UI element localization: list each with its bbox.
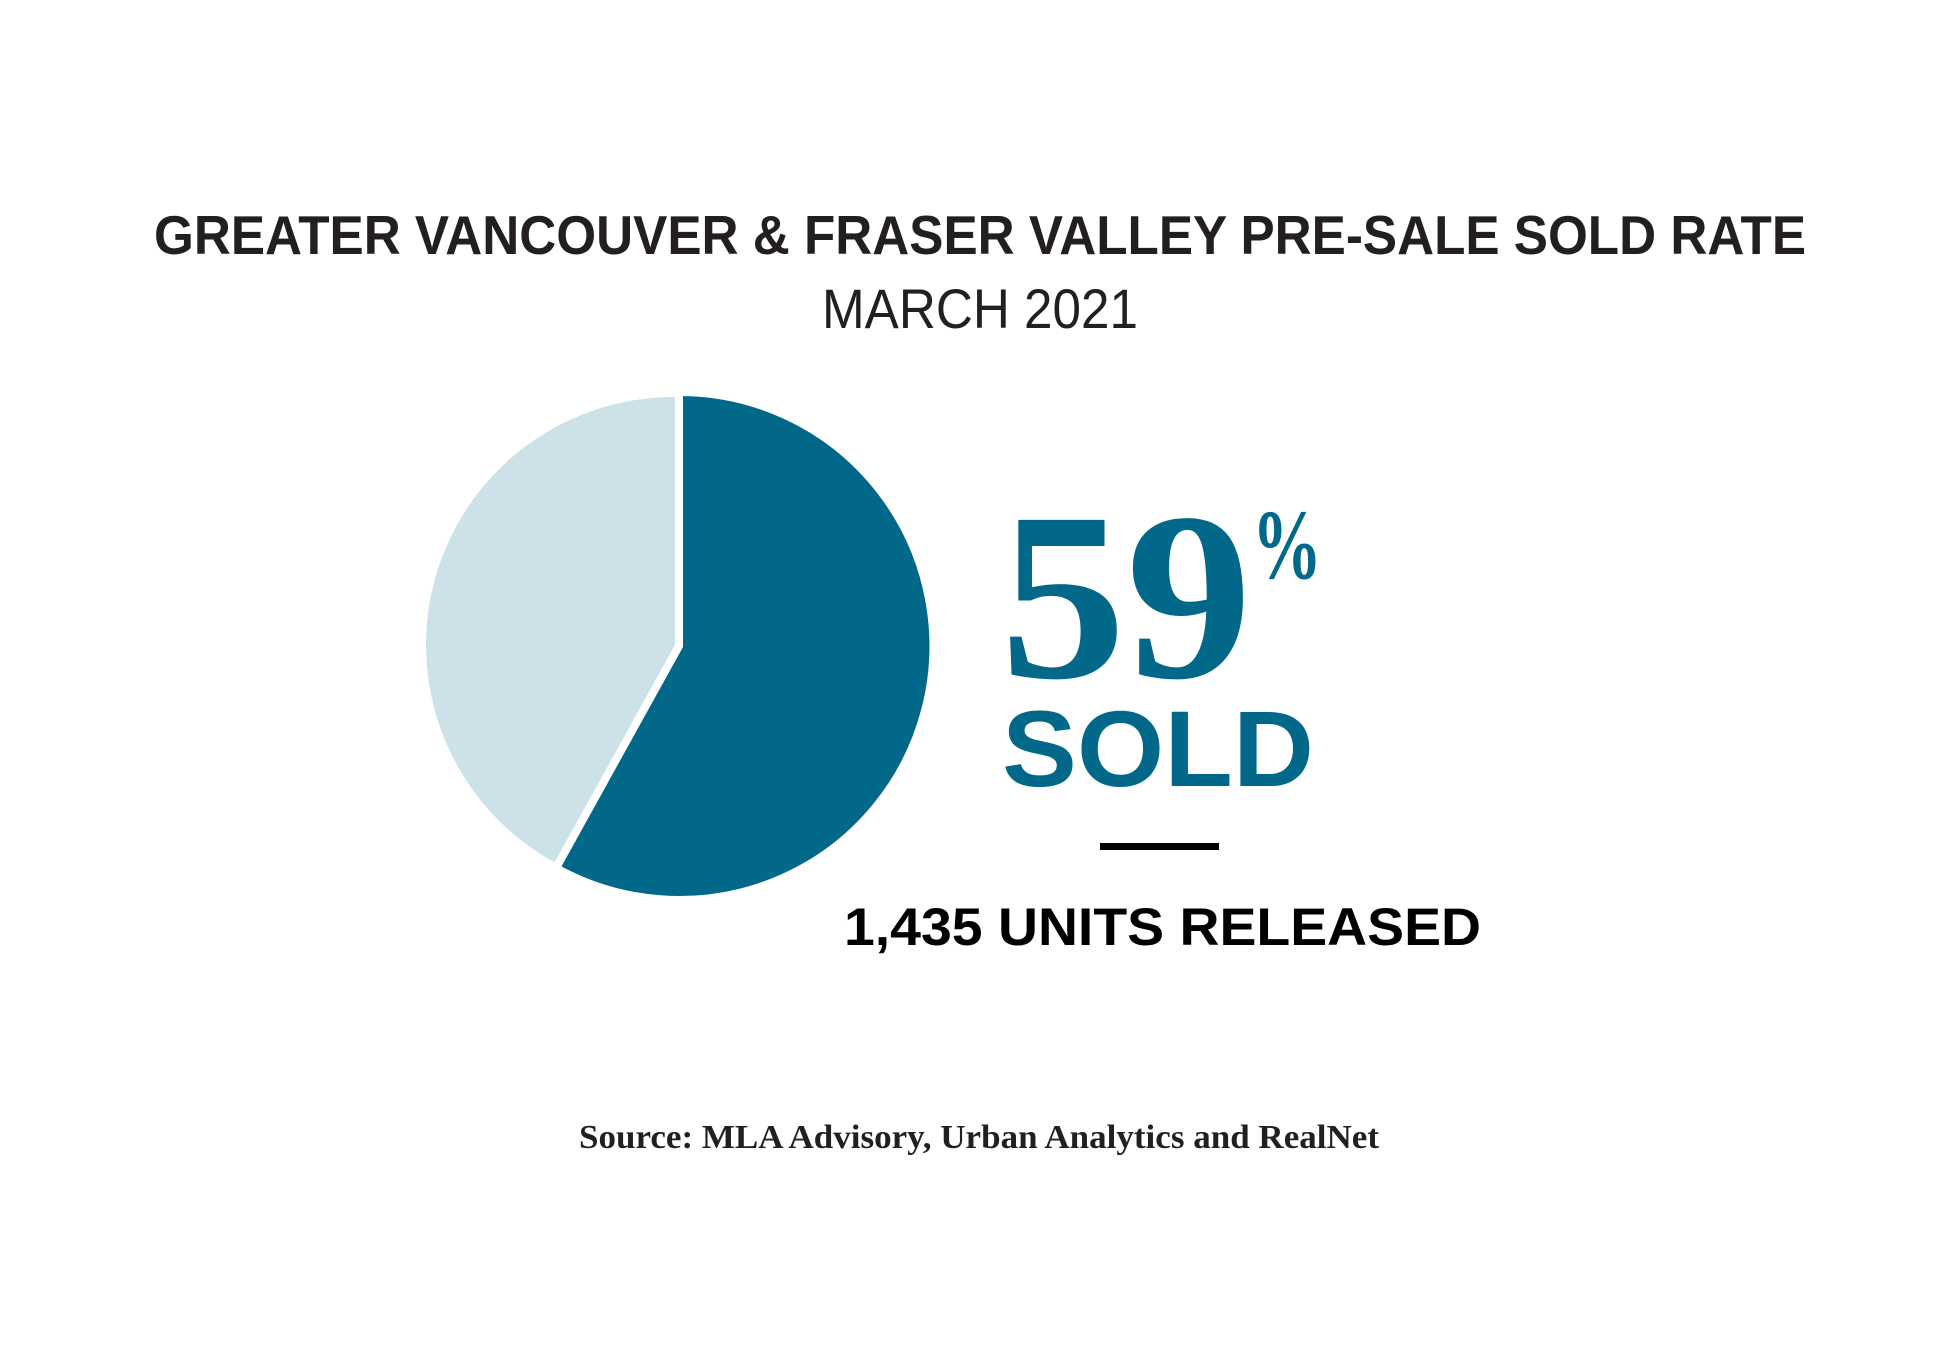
source: Source: MLA Advisory, Urban Analytics and RealNet: [579, 1119, 1380, 1156]
SOLD label: SOLD: [1002, 688, 1314, 809]
big percentage: 59: [1000, 463, 1252, 729]
title: GREATER VANCOUVER & FRASER VALLEY PRE-SALE SOLD RATE: [154, 204, 1806, 266]
pie slice: sold 59%: [556, 392, 933, 900]
pie slice: unsold: [426, 397, 922, 893]
units released: 1,435 UNITS RELEASED: [844, 898, 1481, 957]
big percentage: %: [1252, 489, 1322, 600]
subtitle: MARCH 2021: [822, 277, 1138, 340]
pie chart: [426, 392, 933, 900]
